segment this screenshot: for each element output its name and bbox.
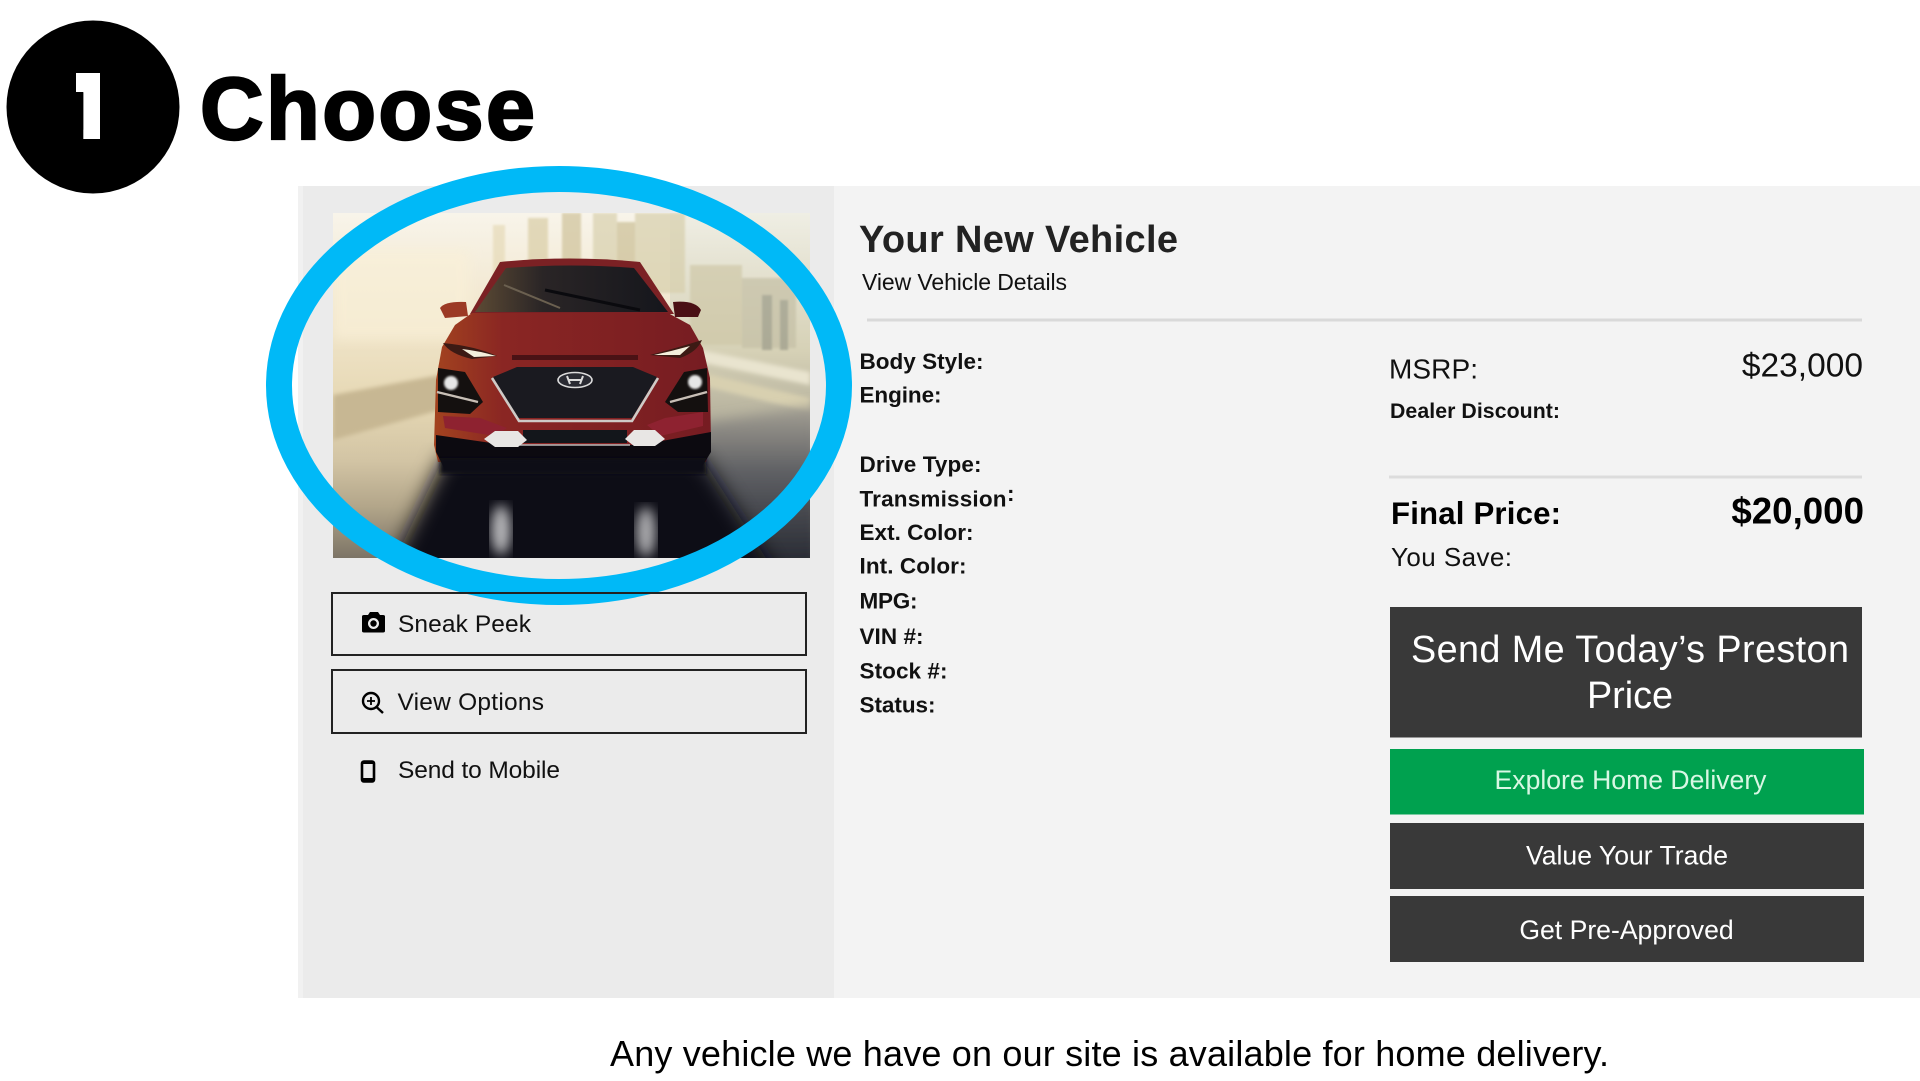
vehicle specification labels: VIN #: [860,624,924,649]
button: Sneak Peek [332,593,806,655]
price: Final Price [1391,490,1864,532]
vehicle specification labels: Transmission [860,486,1006,512]
price: MSRP: $23,000 [1742,348,1863,384]
price: MSRP: MSRP: [1389,354,1478,384]
button: Explore Home Delivery [1390,749,1864,814]
step number badge: 1 [72,57,123,159]
highlight ring around vehicle photo [279,179,839,592]
vehicle specification labels: Drive Type: [860,452,982,477]
price: MSRP [1389,348,1863,384]
button: Send Me Today's Preston Price [1390,607,1862,738]
button: View Options: View Options [398,689,544,716]
button: Send Me Today's Preston Price: Price [1587,675,1673,717]
vehicle specification labels [860,349,1014,718]
price: Final Price: $20,000 [1731,490,1864,532]
vehicle specification labels: Stock #: [860,658,948,684]
caption: Any vehicle we have on our site is available for home delivery. [610,1033,1609,1074]
button: Explore Home Delivery: Explore Home Delivery [1495,765,1767,795]
label: You Save: You Save: [1391,542,1512,572]
vehicle specification labels: Engine: [860,382,942,408]
panel: vehicle details [834,186,1920,998]
link: Send to Mobile: Send to Mobile [398,757,560,784]
button: Send Me Today's Preston Price: Send Me Today’s Preston [1411,629,1849,671]
button: Get Pre-Approved [1390,896,1864,962]
vehicle specification labels: Ext. Color: [860,520,974,545]
vehicle specification labels: Int. Color: [860,554,966,578]
button: Sneak Peek: Sneak Peek [398,611,532,638]
panel: vehicle image sidebar [298,186,834,998]
vehicle photo: red SUV on a wet road [333,213,820,580]
button: Value Your Trade: Value Your Trade [1526,840,1728,870]
car body [434,258,711,474]
button: View Options [332,670,806,733]
price: Final Price: Final Price: [1391,496,1561,531]
heading: Your New Vehicle: Your New Vehicle [859,219,1178,261]
button: Value Your Trade [1390,823,1864,889]
vehicle specification labels: MPG: [860,588,918,614]
step number badge [6,20,180,194]
vehicle specification labels: Body Style: [860,349,984,374]
title: Choose: Choose [200,59,535,158]
label: Dealer Discount: Dealer Discount: [1390,399,1560,423]
button: Get Pre-Approved: Get Pre-Approved [1519,915,1734,945]
vehicle specification labels: : [1007,481,1014,506]
vehicle specification labels: Status: [860,692,936,718]
link: View Vehicle Details: View Vehicle Details [862,269,1067,295]
